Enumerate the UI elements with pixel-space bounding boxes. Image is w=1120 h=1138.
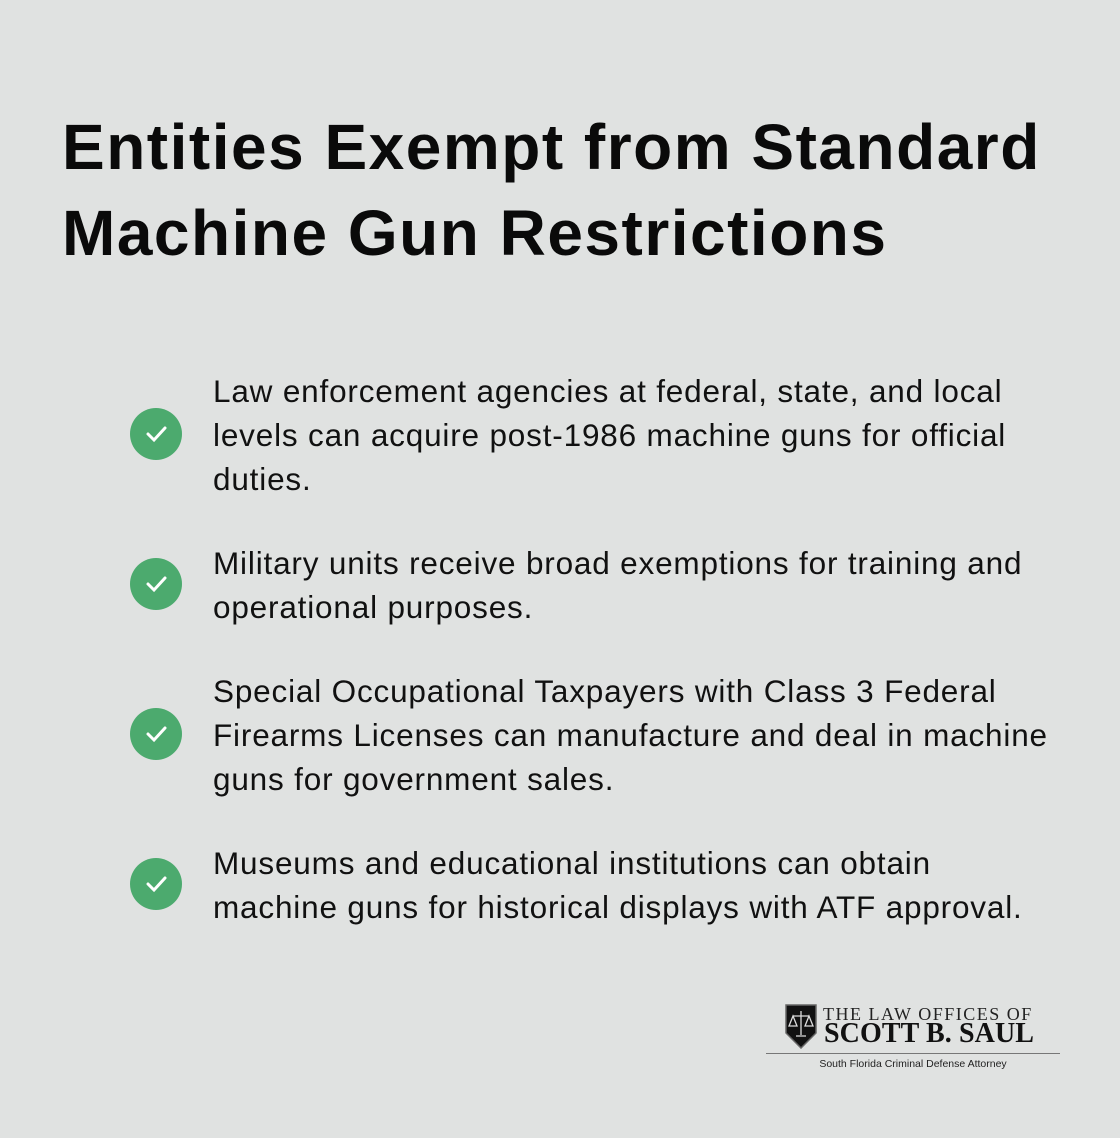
text: [213, 373, 1006, 497]
text: Military units receive broad exemptions for training and: [213, 545, 1022, 581]
title: [62, 111, 1041, 269]
text: Law enforcement agencies at federal, state, and local: [213, 373, 1002, 409]
title: Machine Gun Restrictions: [62, 197, 887, 269]
logo text: THE LAW OFFICES OF: [823, 1004, 1033, 1024]
item 2: [130, 545, 1022, 625]
text: machine guns for historical displays with ATF approval.: [213, 889, 1023, 925]
icon: shield with scales: [785, 1004, 817, 1049]
item 4: [130, 845, 1023, 925]
text: duties.: [213, 461, 312, 497]
item 3: [130, 673, 1048, 797]
text: Firearms Licenses can manufacture and deal in machine: [213, 717, 1048, 753]
logo: [766, 1004, 1060, 1070]
icon: check: [130, 858, 182, 910]
icon: check: [130, 708, 182, 760]
text: Special Occupational Taxpayers with Class 3 Federal: [213, 673, 997, 709]
text: Museums and educational institutions can obtain: [213, 845, 931, 881]
text: [213, 545, 1022, 625]
logo: SCOTT B. SAUL: [824, 1018, 1034, 1049]
text: operational purposes.: [213, 589, 533, 625]
logo: South Florida Criminal Defense Attorney: [819, 1058, 1007, 1070]
icon: check: [130, 408, 182, 460]
title: Entities Exempt from Standard: [62, 111, 1041, 183]
icon: check: [130, 558, 182, 610]
item 1: [130, 373, 1006, 497]
text: levels can acquire post-1986 machine guns for official: [213, 417, 1006, 453]
text: guns for government sales.: [213, 761, 614, 797]
text: [213, 845, 1023, 925]
text: [213, 673, 1048, 797]
